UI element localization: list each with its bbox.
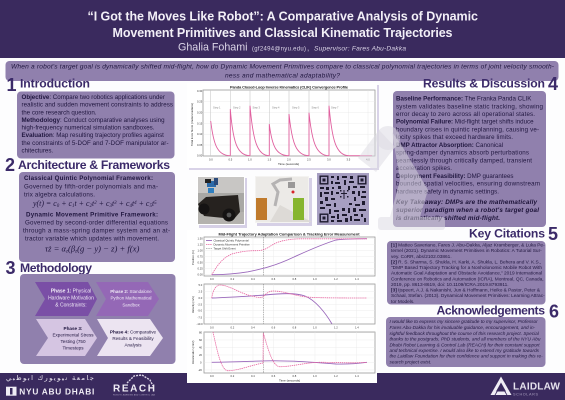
section 1: introduction bbox=[6, 75, 174, 158]
subplot: velocity: 0.8 bbox=[292, 326, 297, 330]
equation: quintic polynomial: + c bbox=[117, 199, 130, 208]
panel: frameworks bbox=[19, 172, 175, 262]
panel: citations: "DMP Based Trajectory Tracking for a Nonholonomic Mobile Robot With bbox=[391, 265, 542, 271]
chart: CLIK convergence profile: 0.0 bbox=[209, 158, 213, 162]
chevron: phase 1 bbox=[35, 282, 97, 316]
panel: frameworks: through a mass-spring damper system and an at- bbox=[23, 227, 170, 234]
panel: acknowledgements: search project exist. bbox=[390, 359, 431, 364]
subplot: acceleration: 0 bbox=[200, 360, 202, 364]
heading: methodology: 3 bbox=[6, 258, 16, 278]
panel: acknowledgements: I would like to express my sincere gratitude to my supervisor, Professor bbox=[390, 319, 538, 324]
chart: CLIK convergence profile: 0.00 bbox=[197, 154, 203, 158]
subplot: position: 0.2 bbox=[230, 277, 235, 281]
section 3: methodology bbox=[6, 258, 176, 364]
chart: CLIK convergence profile: Step 5 bbox=[292, 106, 300, 110]
panel: results: error decay to zero across all operational states. bbox=[396, 111, 535, 118]
equation: quintic polynomial: 4 bbox=[129, 204, 132, 209]
logo: REACH lab bbox=[113, 375, 156, 396]
chart: CLIK convergence profile: Step 6 bbox=[312, 106, 320, 110]
subplot: acceleration: 0.4 bbox=[251, 374, 255, 378]
equation: quintic polynomial: 0 bbox=[57, 204, 60, 209]
authors: (gf2494@nyu.edu) bbox=[252, 46, 306, 52]
chart: trajectory adaptation comparison bbox=[187, 230, 377, 383]
section 6: acknowledgements bbox=[386, 302, 559, 367]
heading: introduction bbox=[6, 75, 90, 95]
panel: results: Deployment Feasibility: DMP guarantees bbox=[396, 173, 514, 180]
chart: CLIK convergence profile: 0.20 bbox=[197, 110, 203, 114]
subplot: position: 1.4 bbox=[355, 277, 359, 281]
chart: CLIK convergence profile: 0.30 bbox=[197, 89, 203, 93]
chevron: phase 3: Timesteps bbox=[62, 346, 84, 350]
chevron: phase 2: Phase 2: Standalone bbox=[110, 289, 152, 294]
subplot: position: 0.8 bbox=[292, 277, 297, 281]
chart: CLIK convergence profile: 0.10 bbox=[197, 132, 203, 136]
heading: acknowledgements: 6 bbox=[549, 302, 559, 322]
heading: introduction: Introduction bbox=[20, 77, 90, 91]
subplot: velocity: 0.0 bbox=[198, 296, 203, 300]
subplot: velocity: 2.5 bbox=[198, 290, 203, 294]
subplot: velocity: -10.0 bbox=[196, 322, 203, 326]
chart: CLIK convergence profile: 1.0 bbox=[248, 158, 252, 162]
panel: results: Baseline Performance: The Franka Panda CLIK bbox=[396, 96, 532, 103]
equation: quintic polynomial: t bbox=[112, 199, 115, 208]
chevron: phase 3 bbox=[36, 319, 97, 356]
subplot: acceleration: 1.4 bbox=[355, 374, 359, 378]
heading: key citations bbox=[469, 224, 558, 244]
panel: acknowledgements: the Laidlaw Foundation for their confidence and support in making this re- bbox=[390, 354, 543, 359]
heading: key citations: 5 bbox=[548, 224, 558, 244]
logo: NYU Abu Dhabi bbox=[6, 375, 94, 396]
panel: introduction: the core research question. bbox=[22, 109, 97, 116]
panel: results: bounded spatial velocities, ensuring downstream bbox=[396, 181, 540, 188]
subplot: velocity: 0.4 bbox=[251, 326, 255, 330]
subplot: acceleration: 1.0 bbox=[313, 374, 317, 378]
subplot: position: 1.25 bbox=[198, 243, 203, 247]
panel: introduction: Methodology: Conduct comparative analyses using bbox=[22, 117, 165, 124]
chart: CLIK convergence profile: 2.5 bbox=[307, 158, 311, 162]
logo: REACH lab: REACH bbox=[113, 384, 155, 394]
header banner bbox=[0, 0, 565, 58]
authors bbox=[178, 42, 406, 54]
subplot: velocity: -7.5 bbox=[198, 315, 203, 319]
chevron: phase 4 bbox=[97, 319, 163, 356]
equation: quintic polynomial: 5 bbox=[154, 201, 157, 206]
chevron: phase 1: Hardware Motivation bbox=[48, 296, 94, 302]
chart: CLIK convergence profile: 2.0 bbox=[287, 158, 291, 162]
panel: results: locity spikes that exceed hardware limits. bbox=[396, 134, 513, 141]
panel: citations: Conference on Robotics and Automation (ICRA), Montreal, QC, Canada, bbox=[391, 276, 544, 282]
chart: CLIK convergence profile: Time (seconds) bbox=[278, 162, 299, 166]
heading: results and discussion bbox=[423, 74, 558, 94]
subplot: velocity: 1.2 bbox=[334, 326, 338, 330]
panel: frameworks: trix algebra calculations. bbox=[24, 192, 95, 198]
chevron: phase 2 bbox=[96, 282, 159, 316]
research question: ness and mathematical adaptability? bbox=[225, 72, 340, 80]
panel: citations: tor Models. bbox=[391, 299, 414, 305]
subplot: position: 1.2 bbox=[334, 277, 338, 281]
photo: simulated arm with blocks bbox=[255, 176, 312, 226]
panel: introduction: realistic and sudden movement constraints to address bbox=[22, 102, 173, 109]
research question bbox=[6, 61, 558, 81]
panel: citations: Automatic Goal Adaptation and Obstacle Avoidance," 2019 International bbox=[391, 271, 542, 277]
chart: trajectory adaptation comparison: Mid-Flight Trajectory Adaptation Comparison & Tracking Error Measurement bbox=[218, 232, 360, 236]
panel: frameworks: Governed by fifth-order polynomials and ma- bbox=[24, 184, 158, 190]
subplot: velocity bbox=[191, 283, 375, 330]
chart: CLIK convergence profile: 0.15 bbox=[197, 121, 203, 125]
equation: dynamic movement primitive: z bbox=[65, 250, 68, 255]
subplot: acceleration: 40 bbox=[199, 345, 202, 349]
subplot: acceleration bbox=[191, 331, 375, 382]
equation: quintic polynomial: 4 bbox=[134, 201, 137, 206]
chevron: phase 4: Phase 4: Comparative bbox=[110, 330, 157, 334]
subplot: acceleration: 0.6 bbox=[272, 374, 276, 378]
panel: frameworks: Classical Quintic Polynomial Framework: bbox=[24, 175, 153, 182]
chart: CLIK convergence profile: Panda Closed-Loop Inverse Kinematics (CLIK) Convergence Profile bbox=[230, 84, 349, 90]
key takeaway: is dramatically shifted mid-flight. bbox=[396, 215, 500, 222]
chevron: phase 2: Sandbox bbox=[122, 302, 140, 308]
subplot: position: 1.50 bbox=[198, 237, 203, 241]
equation: quintic polynomial: 2 bbox=[94, 201, 97, 206]
subplot: acceleration: -20 bbox=[198, 368, 202, 372]
panel: acknowledgements bbox=[386, 317, 546, 367]
subplot: velocity: 0.0 bbox=[210, 326, 214, 330]
chevron: phase 4: Results & Feasibility bbox=[112, 336, 154, 341]
authors: , bbox=[307, 44, 309, 52]
chart: CLIK convergence profile: 0.25 bbox=[197, 100, 203, 104]
subplot: acceleration: 0.2 bbox=[230, 374, 235, 378]
panel: results: spring-damper dynamics absorb perturbations bbox=[396, 150, 529, 157]
equation: quintic polynomial: t + c bbox=[75, 199, 90, 208]
chart: CLIK convergence profile: Step 4 bbox=[272, 106, 280, 110]
logo: NYU Abu Dhabi: جامعة نيويورك ابوظبي bbox=[6, 375, 94, 382]
heading: introduction: 1 bbox=[6, 75, 17, 95]
panel: methodology bbox=[20, 274, 176, 364]
chevron: phase 3: Testing (750 bbox=[60, 339, 86, 344]
chart: CLIK convergence profile: 1.5 bbox=[268, 158, 272, 162]
subplot: position bbox=[191, 237, 375, 281]
equation: quintic polynomial: + c bbox=[97, 199, 110, 208]
title: Movement Primitives and Classical Kinematic Trajectories bbox=[112, 26, 453, 40]
title bbox=[88, 10, 478, 40]
chevron: phase 4: Analysis bbox=[124, 342, 142, 348]
heading: key citations: Key Citations bbox=[469, 227, 545, 241]
authors: Ghalia Fohami bbox=[178, 42, 248, 54]
panel: results: Polynomial Failure: Mid-flight target shifts induce bbox=[396, 119, 534, 126]
subplot: velocity: 0.6 bbox=[272, 326, 276, 330]
subplot: acceleration: Acceleration (m/s²) bbox=[191, 340, 195, 364]
panel: acknowledgements: and technical expertise. I would also like to extend my gratitude towards bbox=[390, 348, 540, 353]
subplot: acceleration: 80 bbox=[199, 331, 202, 335]
chart: CLIK convergence profile: 3.0 bbox=[327, 158, 331, 162]
subplot: position: Target Shift Event bbox=[214, 246, 236, 250]
equation: quintic polynomial: 3 bbox=[114, 201, 117, 206]
panel: introduction: high-frequency numerical simulation sandboxes. bbox=[22, 124, 155, 131]
chart: CLIK convergence profile: 3.5 bbox=[346, 158, 351, 162]
subplot: velocity: 1.0 bbox=[313, 326, 317, 330]
panel: results: system validates baseline static tracking, showing bbox=[396, 103, 544, 110]
equation: dynamic movement primitive: τż = α bbox=[45, 244, 66, 254]
panel: citations: ternel (2021). Dynamic Movement Primitives in Robotics: A Tutorial Sur- bbox=[391, 248, 542, 254]
chart: CLIK convergence profile: 0.5 bbox=[228, 158, 233, 162]
section 5: key citations bbox=[387, 224, 558, 305]
equation: dynamic movement primitive: (g − y) − z) + f(x) bbox=[77, 244, 139, 254]
subplot: acceleration: 60 bbox=[199, 338, 202, 342]
equation: dynamic movement primitive: z bbox=[74, 250, 77, 255]
chart: CLIK convergence profile: Step 2 bbox=[233, 106, 241, 110]
QR code bbox=[317, 173, 369, 225]
heading: acknowledgements bbox=[436, 302, 559, 322]
equation: quintic polynomial: 2 bbox=[89, 204, 92, 209]
background robot arm silhouette bbox=[358, 126, 445, 230]
panel: introduction: Objective: Compare two robotics applications under bbox=[22, 94, 165, 101]
subplot: acceleration: 20 bbox=[199, 353, 202, 357]
heading: results and discussion: 4 bbox=[548, 74, 558, 94]
panel: citations: [3] Ijspeert, A.J. & Nakanishi, Jun & Hoffmann, Heiko & Pastor, Peter & bbox=[391, 288, 541, 294]
chevron: phase 1: Phase 1: Physical bbox=[51, 289, 91, 295]
subplot: position: 0.00 bbox=[198, 273, 203, 277]
chart: CLIK convergence profile: 0.05 bbox=[197, 143, 203, 147]
panel: introduction: chitectures. bbox=[22, 148, 53, 155]
equation: quintic polynomial: 1 bbox=[72, 204, 75, 209]
subplot: velocity: -5.0 bbox=[198, 309, 203, 313]
subplot: acceleration: 0.0 bbox=[210, 374, 214, 378]
heading: methodology: Methodology bbox=[20, 261, 92, 275]
equation: quintic polynomial: + c bbox=[137, 199, 150, 208]
photo: robot arm on mobile platform bbox=[197, 176, 247, 228]
subplot: acceleration: Time (seconds) bbox=[279, 378, 300, 382]
equation: quintic polynomial: + c bbox=[59, 199, 73, 208]
logo: Laidlaw Scholars: SCHOLARS bbox=[513, 392, 538, 396]
panel: results: boundary crises in quintic replanning, causing ve- bbox=[396, 126, 539, 133]
subplot: position: 1.00 bbox=[198, 249, 203, 253]
panel: results: acceleration spikes. bbox=[396, 165, 452, 172]
panel: acknowledgements: Dhabi Robot Learning & Control Lab (REACH) for their constant support bbox=[390, 342, 540, 348]
panel: introduction bbox=[17, 92, 174, 158]
panel: citations: vey. CoRR, abs/2102.03861. bbox=[391, 254, 452, 260]
subplot: position: 0.25 bbox=[198, 267, 203, 271]
panel: citations: [2] R. S. Sharma, S. Shukla, H. Karki, A. Shukla, L. Behera and V. K.S., bbox=[391, 259, 541, 265]
subplot: position: 0.50 bbox=[198, 261, 203, 265]
equation: quintic polynomial: t bbox=[132, 199, 135, 208]
title: “I Got the Moves Like Robot”: A Comparative Analysis of Dynamic bbox=[88, 10, 478, 24]
panel: results: DMP Attractor Absorption: Canonical bbox=[396, 142, 503, 149]
equation: dynamic movement primitive: (β bbox=[68, 244, 76, 254]
equation: quintic polynomial: t bbox=[92, 199, 95, 208]
panel: results: hardware safety in dynamic settings. bbox=[396, 188, 499, 196]
heading: results and discussion: Results & Discussion bbox=[423, 77, 545, 91]
subplot: position: 0.75 bbox=[198, 255, 203, 259]
subplot: velocity: 1.4 bbox=[355, 326, 359, 330]
key takeaway bbox=[396, 199, 539, 222]
chart: CLIK convergence profile: Step 1 bbox=[213, 106, 221, 110]
panel: frameworks: Dynamic Movement Primitive Framework: bbox=[26, 212, 158, 219]
research question: When a robot's target goal is dynamically shifted mid-flight, how do Dynamic Movement Primitives compare to classical polynomial trajectories in terms of joint velocity smooth- bbox=[11, 64, 555, 70]
subplot: position: Position (m) bbox=[191, 250, 195, 265]
subplot: position: 0.6 bbox=[272, 277, 276, 281]
panel: introduction: the constraints of 5-DOF and 7-DOF manipulator ar- bbox=[22, 140, 168, 147]
chart: CLIK convergence profile bbox=[187, 83, 379, 170]
equation: quintic polynomial: 5 bbox=[149, 204, 152, 209]
subplot: acceleration: 1.2 bbox=[334, 374, 338, 378]
chart: CLIK convergence profile: Step 3 bbox=[252, 106, 261, 110]
subplot: velocity: Velocity (m/s) bbox=[191, 296, 195, 313]
subplot: position: Classical Quintic Polynomial bbox=[214, 238, 249, 242]
panel: citations: [1] Matteo Saveriano, Fares J. Abu-Dakka, Aljaz Kramberger, & Luka Pe- bbox=[391, 242, 545, 248]
subplot: position: Dynamic Movement Primitive bbox=[214, 242, 250, 246]
panel: results: seamlessly through critically damped, transient bbox=[396, 157, 532, 164]
logo: REACH lab: ROBOT LEARNING AND CONTROL LAB bbox=[113, 394, 156, 396]
chart: CLIK convergence profile: Total Error Norm (meters/radians) bbox=[190, 103, 194, 146]
equation: quintic polynomial: t bbox=[152, 199, 155, 208]
authors: Supervisor: Fares Abu-Dakka bbox=[314, 46, 406, 52]
panel: citations bbox=[387, 241, 546, 305]
chevron: phase 3: Phase 3: bbox=[64, 326, 83, 331]
section 4: results and discussion bbox=[393, 74, 558, 227]
chart: CLIK convergence profile: Step 7 bbox=[331, 106, 339, 110]
subplot: velocity: -2.5 bbox=[198, 302, 203, 306]
panel: citations: 2019, pp. 8613-8619, doi: 10.1109/ICRA.2019.8793911. bbox=[391, 282, 509, 288]
heading: architecture and frameworks bbox=[5, 155, 170, 175]
subplot: position: 1.0 bbox=[313, 277, 317, 281]
subplot: position: 0.0 bbox=[210, 277, 214, 281]
panel: introduction: Evaluation: Map resulting trajectory profiles against bbox=[22, 132, 164, 139]
heading: acknowledgements: Acknowledgements bbox=[436, 303, 545, 317]
panel: acknowledgements: sightful feedback throughout the course of this research project. Special bbox=[390, 331, 540, 336]
footer band bbox=[0, 373, 565, 400]
subplot: position: 0.4 bbox=[251, 277, 255, 281]
subplot: acceleration: 0.8 bbox=[292, 374, 297, 378]
chart: CLIK convergence profile: 4.0 bbox=[366, 158, 370, 162]
panel: results bbox=[393, 91, 546, 227]
subplot: velocity: 5.0 bbox=[198, 283, 203, 287]
heading: architecture and frameworks: 2 bbox=[5, 155, 15, 175]
heading: architecture and frameworks: Architecture & Frameworks bbox=[18, 158, 170, 172]
panel: citations: Schaal, Stefan. (2013). Dynamical Movement Primitives: Learning Attrac- bbox=[391, 293, 545, 299]
equation: quintic polynomial: y(t) = c bbox=[33, 199, 57, 208]
logo: Laidlaw Scholars: LAIDLAW bbox=[513, 382, 561, 392]
heading: methodology bbox=[6, 258, 92, 278]
chevron: phase 1: & Constraints: bbox=[55, 303, 87, 309]
subplot: velocity: 0.2 bbox=[230, 326, 235, 330]
logo: NYU Abu Dhabi: NYU ABU DHABI bbox=[19, 386, 94, 396]
panel: frameworks: Governed by second-order differential equations bbox=[25, 220, 168, 227]
chevron: phase 3: Experimental Stress bbox=[52, 332, 94, 338]
panel: acknowledgements: thanks to the postgrads, PhD students, and all members of the NYU Abu bbox=[390, 337, 541, 342]
key takeaway: superior paradigm when a robot's target goal bbox=[396, 207, 539, 214]
logo: Laidlaw Scholars bbox=[490, 376, 561, 396]
key takeaway: Key Takeaway: DMPs are the mathematically bbox=[396, 199, 537, 206]
chevron: phase 2: Python Mathematical bbox=[110, 296, 152, 301]
panel: acknowledgements: Fares Abu-Dakka for his invaluable guidance, encouragement, and in- bbox=[390, 325, 536, 330]
equation: quintic polynomial: 3 bbox=[109, 204, 112, 209]
panel: frameworks: tractor variable which updates with movement. bbox=[25, 235, 159, 242]
section 2: architecture bbox=[5, 155, 175, 262]
